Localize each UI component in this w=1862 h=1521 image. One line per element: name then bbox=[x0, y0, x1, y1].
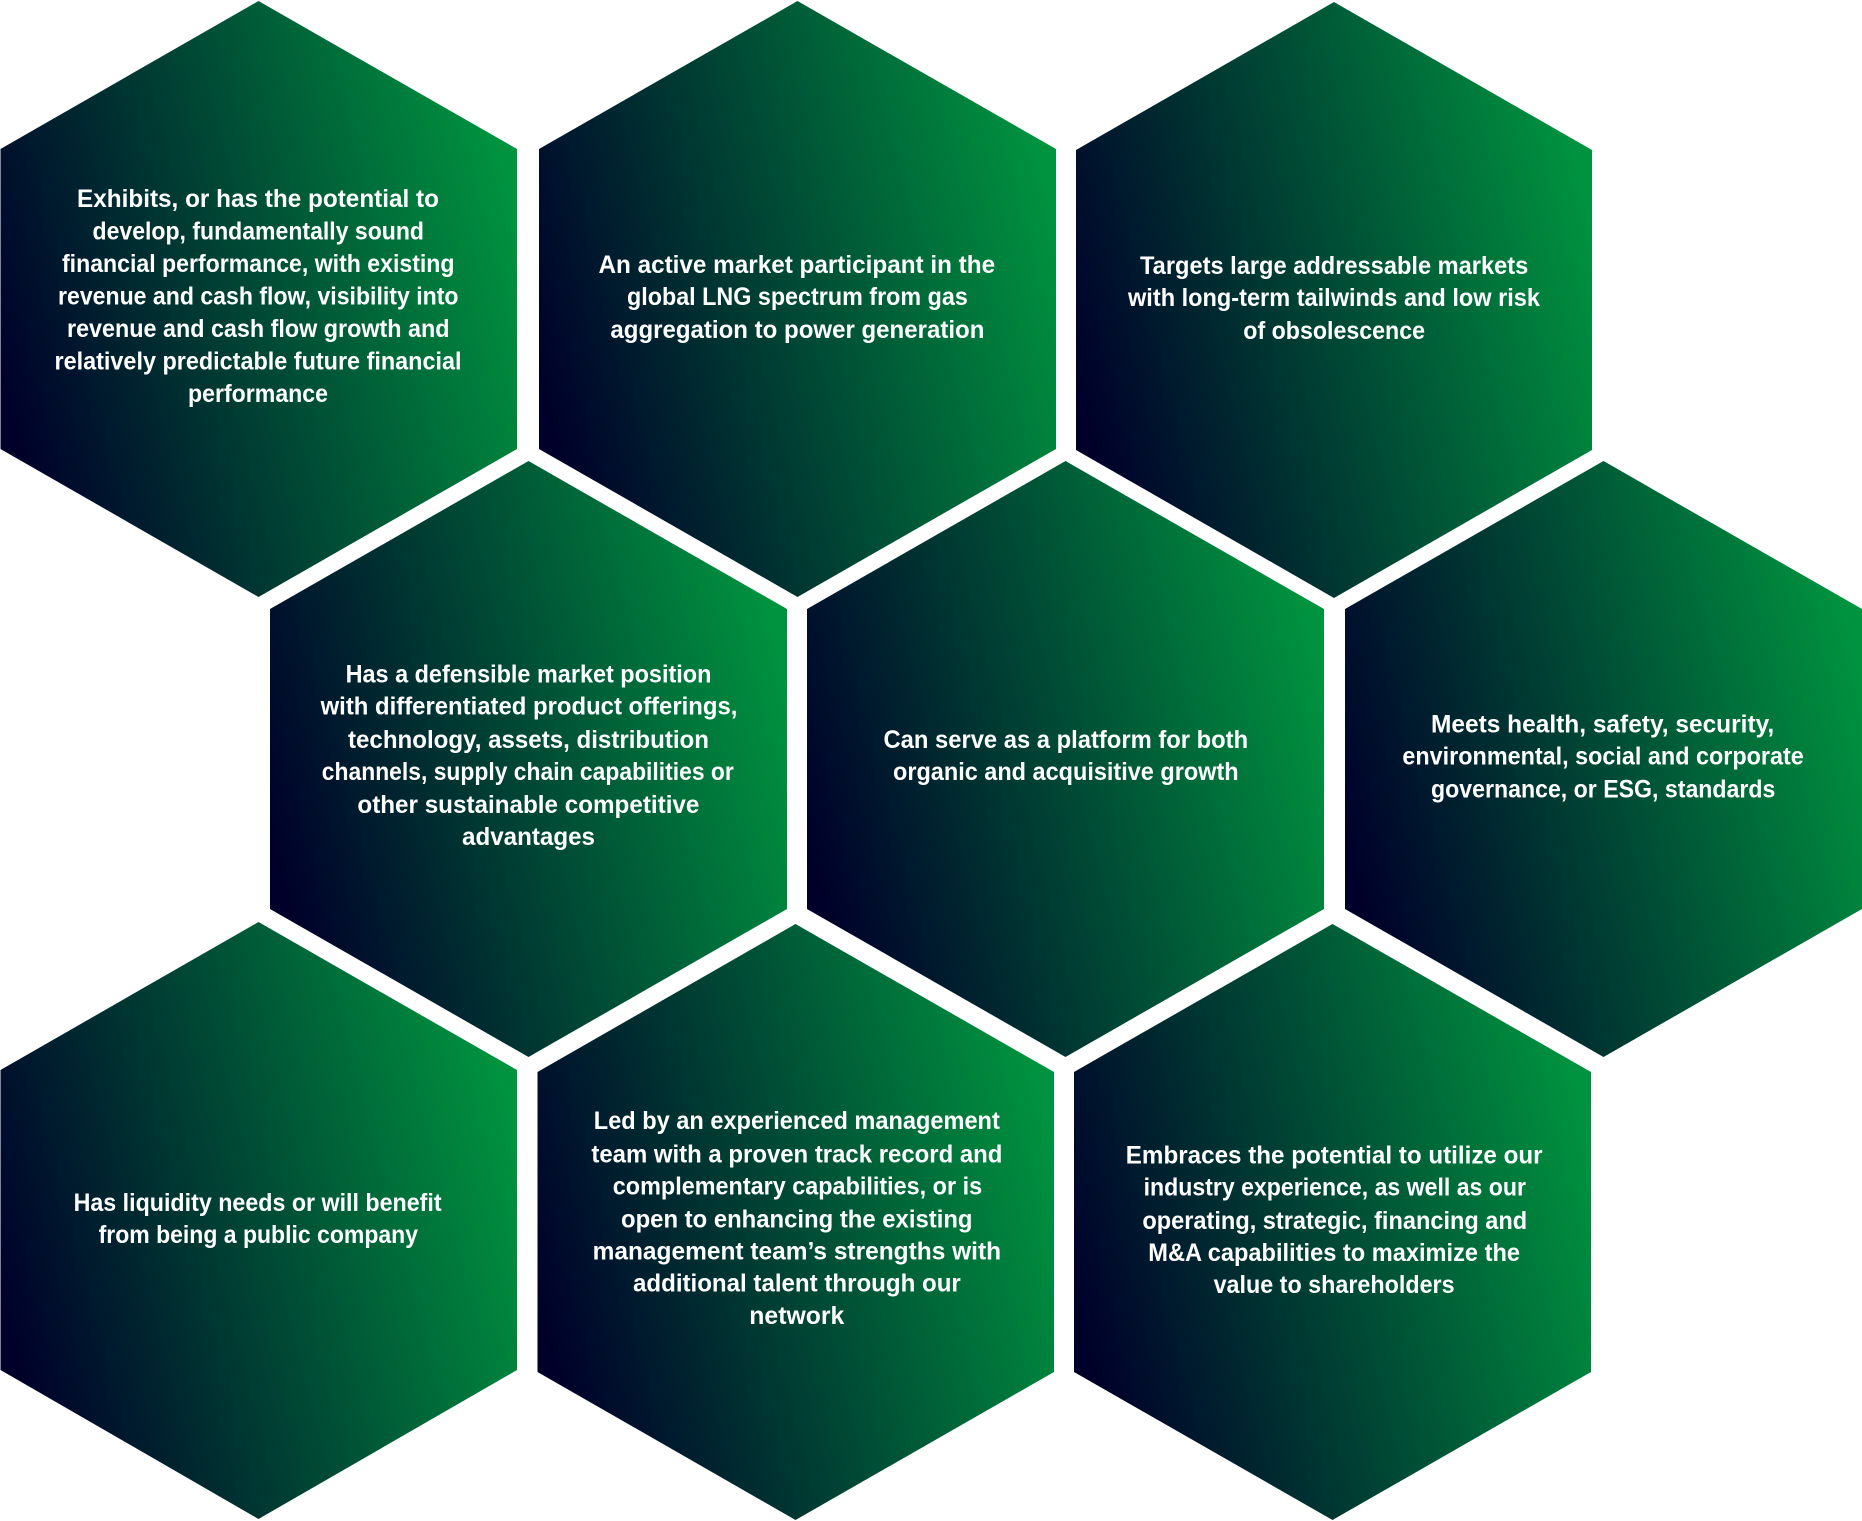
text: shareholder value: Embraces the potential to utilize our bbox=[1126, 1141, 1543, 1169]
text: financial performance: performance bbox=[188, 380, 328, 408]
text: ESG standards: governance, or ESG, standards bbox=[1431, 776, 1775, 804]
text: defensible market position: with differentiated product offerings, bbox=[320, 693, 737, 721]
text: shareholder value: industry experience, as well as our bbox=[1144, 1174, 1526, 1202]
text: financial performance bbox=[54, 185, 462, 408]
text: defensible market position: channels, supply chain capabilities or bbox=[322, 758, 734, 786]
hexagon 9 bbox=[1074, 924, 1591, 1520]
hexagon 4 bbox=[270, 461, 787, 1057]
text: defensible market position: other sustainable competitive bbox=[357, 791, 699, 819]
text: LNG market participant bbox=[598, 251, 995, 344]
panel: LNG market participant bbox=[539, 1, 1056, 597]
text: management team: Led by an experienced management bbox=[594, 1107, 1000, 1135]
text: growth platform: Can serve as a platform for both bbox=[884, 726, 1248, 754]
text: defensible market position: Has a defensible market position bbox=[346, 660, 711, 688]
text: defensible market position: technology, assets, distribution bbox=[348, 726, 709, 754]
panel: ESG standards bbox=[1345, 461, 1862, 1057]
panel: financial performance bbox=[0, 1, 517, 597]
text: addressable markets: with long-term tailwinds and low risk bbox=[1127, 284, 1540, 312]
text: financial performance: relatively predictable future financial bbox=[54, 348, 462, 376]
hexagon 5 bbox=[807, 461, 1324, 1057]
text: growth platform: organic and acquisitive growth bbox=[893, 758, 1239, 786]
panel: addressable markets bbox=[1076, 2, 1592, 598]
hexagon 3 bbox=[1076, 2, 1592, 598]
panel: management team bbox=[538, 924, 1054, 1520]
text: management team: open to enhancing the existing bbox=[621, 1206, 972, 1234]
text: shareholder value: value to shareholders bbox=[1214, 1271, 1455, 1299]
text: shareholder value: operating, strategic, financing and bbox=[1142, 1207, 1527, 1235]
text: financial performance: financial performance, with existing bbox=[62, 250, 454, 278]
hexagon 2 bbox=[539, 1, 1056, 597]
text: defensible market position: advantages bbox=[462, 823, 595, 851]
text: addressable markets: of obsolescence bbox=[1243, 317, 1425, 345]
text: management team: complementary capabilities, or is bbox=[613, 1172, 982, 1200]
text: financial performance: develop, fundamentally sound bbox=[92, 218, 424, 246]
text: ESG standards bbox=[1402, 710, 1804, 804]
text: addressable markets bbox=[1127, 252, 1540, 345]
hexagon 1 bbox=[0, 1, 517, 597]
panel: defensible market position bbox=[270, 461, 787, 1057]
text: liquidity needs bbox=[74, 1189, 442, 1249]
text: management team: team with a proven track record and bbox=[591, 1140, 1002, 1168]
text: liquidity needs: Has liquidity needs or will benefit bbox=[74, 1189, 442, 1217]
hexagon 8 bbox=[538, 924, 1054, 1520]
text: financial performance: revenue and cash flow growth and bbox=[67, 315, 450, 343]
panel: shareholder value bbox=[1074, 924, 1591, 1520]
text: liquidity needs: from being a public company bbox=[99, 1221, 418, 1249]
text: financial performance: revenue and cash flow, visibility into bbox=[58, 282, 458, 310]
panel: growth platform bbox=[807, 461, 1324, 1057]
text: LNG market participant: An active market participant in the bbox=[598, 251, 995, 279]
text: management team: management team’s strengths with bbox=[593, 1238, 1001, 1266]
text: LNG market participant: aggregation to power generation bbox=[610, 316, 984, 344]
text: shareholder value: M&A capabilities to maximize the bbox=[1148, 1239, 1520, 1267]
text: shareholder value bbox=[1126, 1141, 1543, 1299]
text: ESG standards: Meets health, safety, security, bbox=[1431, 710, 1774, 738]
text: management team: additional talent through our bbox=[633, 1270, 961, 1298]
text: growth platform bbox=[884, 726, 1248, 786]
hexagon 6 bbox=[1345, 461, 1862, 1057]
text: LNG market participant: global LNG spectrum from gas bbox=[627, 283, 968, 311]
text: management team: network bbox=[749, 1302, 844, 1330]
panel: liquidity needs bbox=[0, 922, 517, 1519]
hexagon 7 bbox=[0, 922, 517, 1519]
text: financial performance: Exhibits, or has the potential to bbox=[77, 185, 439, 213]
text: management team bbox=[591, 1107, 1002, 1330]
text: defensible market position bbox=[320, 660, 737, 851]
text: addressable markets: Targets large addressable markets bbox=[1140, 252, 1528, 280]
text: ESG standards: environmental, social and corporate bbox=[1402, 742, 1804, 770]
